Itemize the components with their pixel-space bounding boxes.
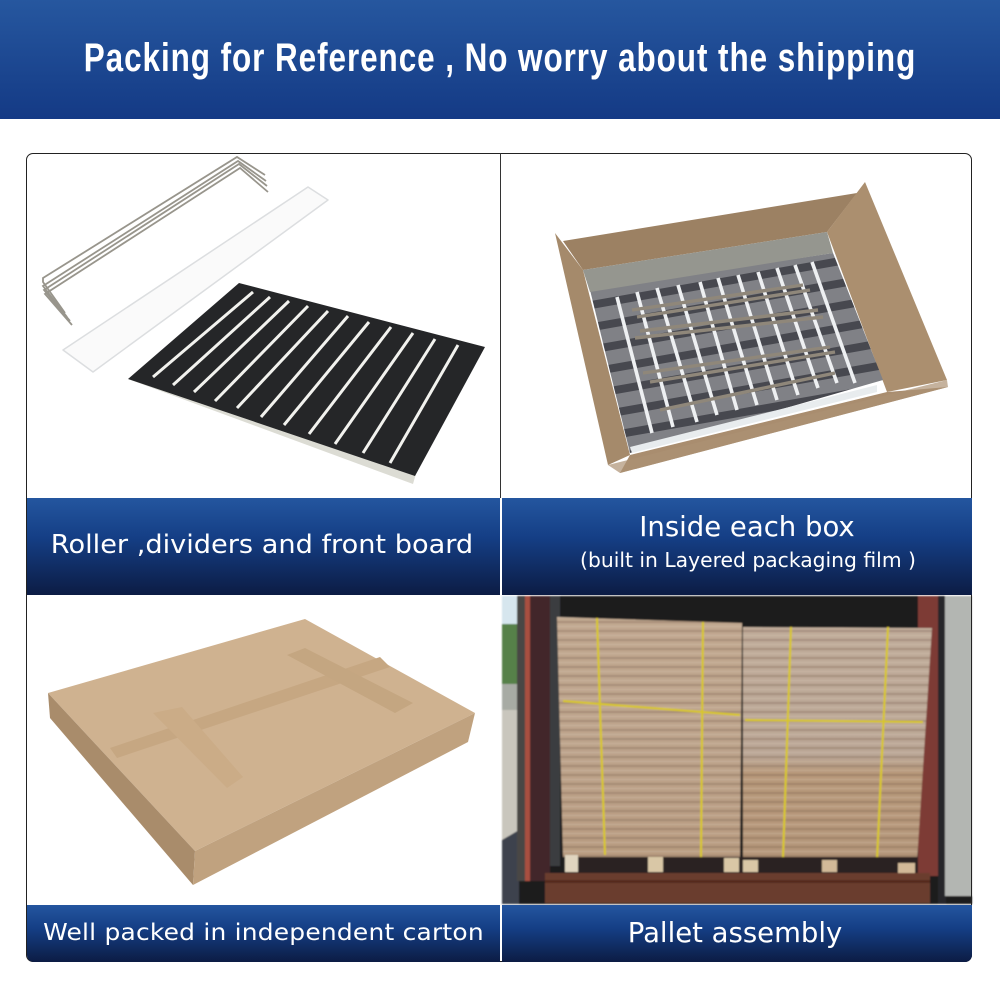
film top strip bbox=[583, 232, 833, 292]
caption: carton: Well packed in independent carton bbox=[43, 920, 484, 946]
title banner bbox=[0, 0, 1000, 119]
tape bbox=[110, 657, 390, 758]
rods in box bbox=[632, 285, 835, 410]
photo: roller, dividers and front board bbox=[43, 157, 485, 484]
roller rods bbox=[43, 157, 268, 325]
photo: inside each box bbox=[555, 182, 948, 473]
open carton flaps bbox=[563, 193, 857, 270]
panel frame bbox=[26, 153, 972, 962]
caption: pallet assembly: Pallet assembly bbox=[628, 917, 842, 949]
outdoor scene bbox=[502, 596, 519, 904]
pallet stacks bbox=[557, 617, 742, 857]
caption: pallet assembly bbox=[502, 905, 972, 962]
caption: inside each box: Inside each box bbox=[639, 511, 855, 543]
yellow straps bbox=[563, 618, 923, 860]
photo: pallet assembly bbox=[502, 596, 972, 904]
pallets bbox=[565, 857, 918, 873]
container sill bbox=[545, 873, 930, 903]
caption: roller bbox=[27, 498, 500, 595]
caption: roller: Roller ,dividers and front board bbox=[51, 530, 473, 560]
dividers panel bbox=[128, 379, 417, 484]
centre divider bbox=[500, 153, 501, 498]
panel stripes bbox=[153, 292, 458, 463]
caption: inside each box bbox=[502, 498, 972, 595]
title: Packing for Reference , No worry about the shipping bbox=[84, 36, 916, 80]
left container frame bbox=[517, 596, 525, 881]
clear front board bbox=[63, 187, 328, 372]
bottom white bar bbox=[630, 385, 877, 453]
caption: carton bbox=[27, 905, 500, 962]
photo: independent carton bbox=[48, 619, 475, 885]
caption: inside each box: (built in Layered packaging film ) bbox=[580, 548, 916, 572]
right door bbox=[918, 596, 938, 876]
white slats bbox=[617, 262, 855, 433]
film wrapped contents bbox=[590, 253, 883, 453]
